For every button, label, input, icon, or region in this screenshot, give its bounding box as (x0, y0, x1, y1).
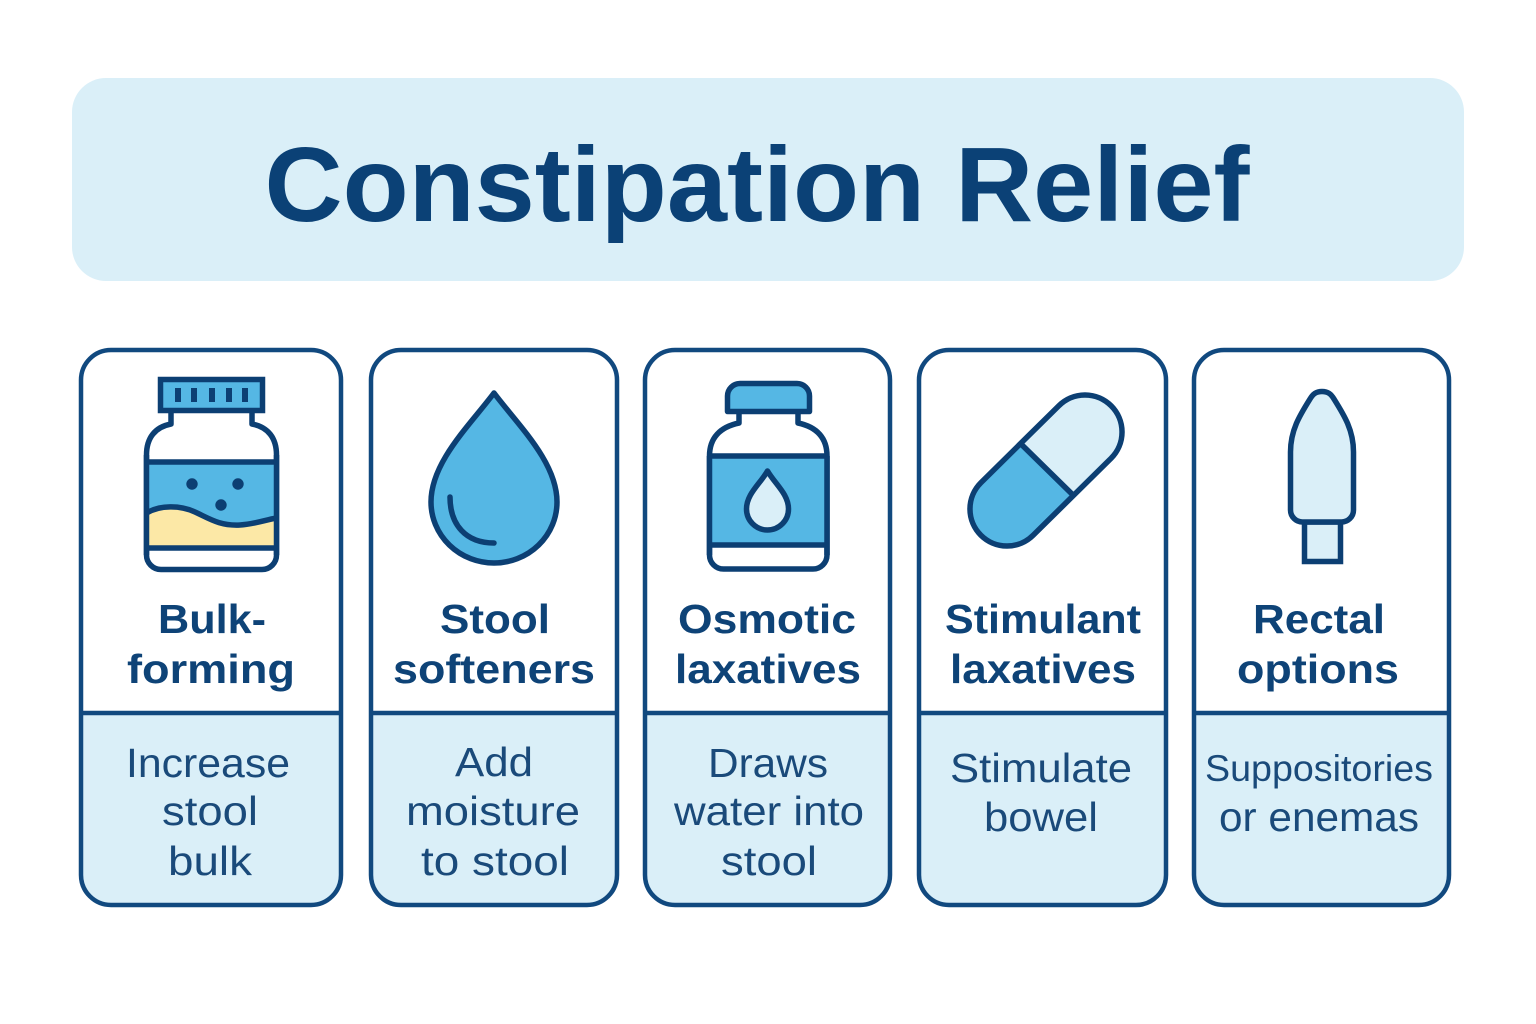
icon: capsule (970, 395, 1122, 546)
heading: Bulk- (158, 596, 266, 642)
title banner (72, 78, 1464, 281)
heading line 2: laxatives (950, 646, 1136, 692)
icon: suppository (1290, 392, 1354, 562)
heading line 2: laxatives (675, 646, 861, 692)
description (406, 739, 580, 884)
description: or enemas (1219, 794, 1419, 840)
title: Constipation Relief (264, 126, 1250, 244)
icon: bottle with drop (710, 384, 827, 569)
description: Suppositories (1205, 747, 1433, 789)
panel: rectal options (1194, 350, 1449, 905)
heading line 2: forming (127, 646, 295, 692)
heading: Stimulant (945, 596, 1141, 642)
heading: Stool (440, 596, 550, 642)
icon: water drop (431, 393, 557, 563)
description (673, 740, 864, 884)
heading line 2: options (1237, 646, 1399, 692)
description: Draws (708, 740, 828, 786)
panel: stool softeners (371, 350, 617, 905)
description: moisture (406, 788, 580, 834)
description: water into (673, 788, 864, 834)
description (950, 745, 1132, 840)
description: Increase (126, 740, 290, 786)
heading: Rectal (1253, 596, 1385, 642)
panel: osmotic laxatives (645, 350, 890, 905)
icon: bottle with bulk fibre (146, 380, 276, 570)
panel: bulk-forming (81, 350, 341, 905)
heading: Osmotic (678, 596, 856, 642)
description: bowel (984, 794, 1098, 840)
description: stool (721, 838, 817, 884)
description: to stool (421, 838, 569, 884)
description: stool (162, 788, 258, 834)
heading line 2: softeners (393, 646, 595, 692)
description (1205, 747, 1433, 840)
description (126, 740, 290, 884)
panel: stimulant laxatives (919, 350, 1166, 905)
description: Stimulate (950, 745, 1132, 791)
description: bulk (168, 838, 253, 884)
description: Add (455, 739, 533, 785)
